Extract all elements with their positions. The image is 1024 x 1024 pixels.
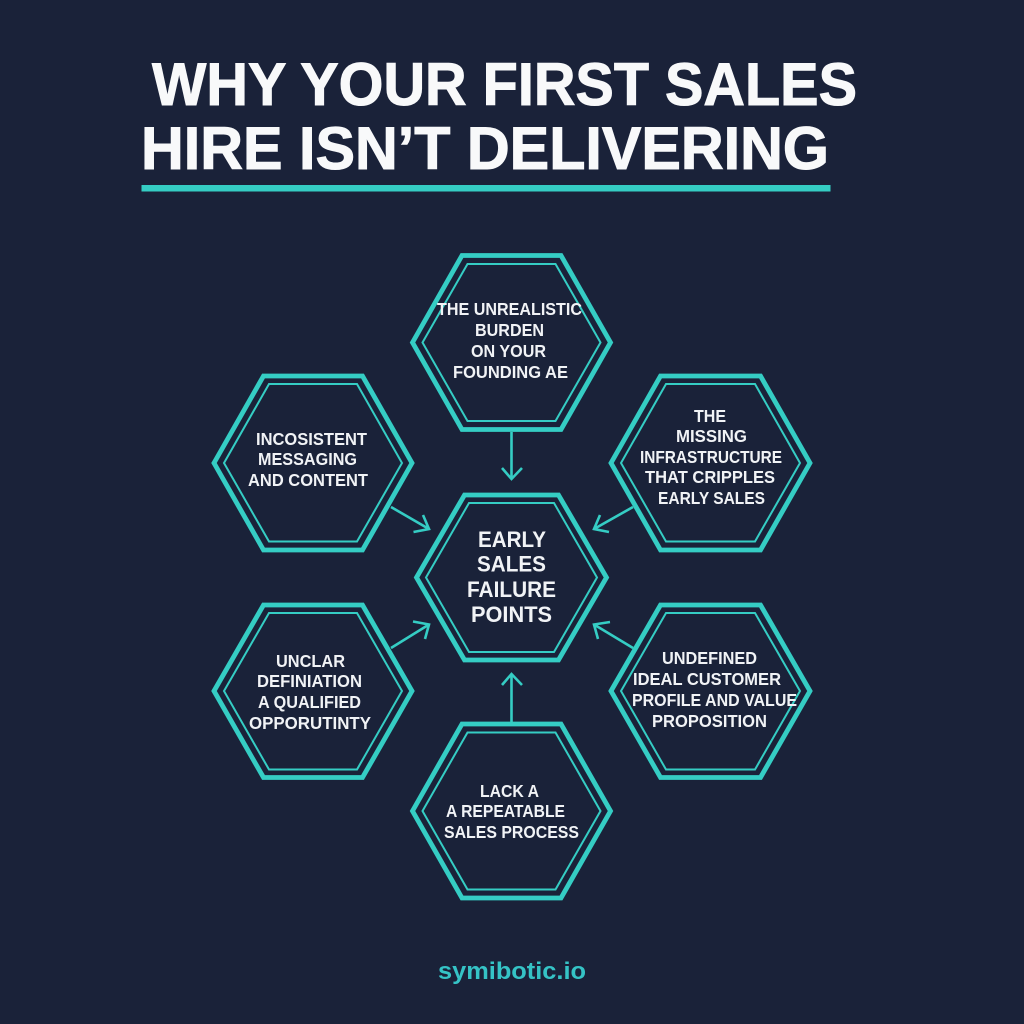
- hexagon: undefined ideal customer profile: IDEAL CUSTOMER: [633, 669, 781, 689]
- arrow: upper left to center: [391, 507, 429, 532]
- center hexagon: early sales failure points: SALES: [477, 552, 546, 576]
- hexagon: the unrealistic burden: FOUNDING AE: [453, 362, 568, 382]
- hexagon: undefined ideal customer profile: PROPOSITION: [652, 711, 767, 731]
- hexagon: the unrealistic burden: THE UNREALISTIC: [437, 299, 582, 319]
- hexagon: inconsistent messaging: MESSAGING: [258, 449, 357, 469]
- hexagon: inconsistent messaging: AND CONTENT: [248, 470, 368, 490]
- center hexagon: early sales failure points: POINTS: [471, 602, 552, 627]
- arrow: upper right to center: [594, 507, 633, 532]
- arrow: lower left to center: [391, 622, 429, 648]
- hexagon: the unrealistic burden: BURDEN: [475, 320, 544, 340]
- hexagon: unclear definition: OPPORUTINTY: [249, 713, 371, 733]
- hexagon: lack a repeatable sales process: SALES PROCESS: [444, 822, 579, 842]
- hexagon: missing infrastructure: THAT CRIPPLES: [645, 467, 775, 487]
- hexagon: lack a repeatable sales process: [412, 724, 610, 898]
- title underline: [142, 185, 830, 192]
- title: WHY YOUR FIRST SALES: [152, 50, 857, 118]
- hexagon: unclear definition: DEFINIATION: [257, 671, 362, 691]
- hexagon: the unrealistic burden: [412, 256, 610, 430]
- arrow: bottom to center: [502, 674, 522, 722]
- footer brand: symibotic.io: [438, 958, 586, 985]
- hexagon: unclear definition: [214, 605, 412, 778]
- hexagon: missing infrastructure: [611, 376, 810, 550]
- center hexagon: early sales failure points: [416, 495, 606, 660]
- hexagon: undefined ideal customer profile: PROFILE AND VALUE: [632, 690, 797, 710]
- center hexagon: early sales failure points: FAILURE: [467, 577, 556, 602]
- hexagon: inconsistent messaging: INCOSISTENT: [256, 429, 367, 449]
- hexagon: missing infrastructure: EARLY SALES: [658, 488, 765, 508]
- title: HIRE ISN’T DELIVERING: [141, 114, 829, 182]
- hexagon: undefined ideal customer profile: UNDEFINED: [662, 648, 757, 668]
- arrow: top to center: [502, 432, 522, 479]
- arrow: lower right to center: [594, 622, 633, 648]
- hexagon: inconsistent messaging: [214, 376, 412, 550]
- title: [141, 50, 857, 182]
- center hexagon: early sales failure points: EARLY: [478, 527, 546, 552]
- hexagon: missing infrastructure: MISSING: [676, 426, 747, 446]
- hexagon: lack a repeatable sales process: LACK A: [480, 781, 539, 801]
- hexagon: undefined ideal customer profile: [611, 605, 810, 778]
- hexagon: lack a repeatable sales process: A REPEATABLE: [446, 801, 565, 821]
- hexagon: unclear definition: UNCLAR: [276, 651, 345, 671]
- hexagon: missing infrastructure: THE: [694, 406, 726, 426]
- hexagon: the unrealistic burden: ON YOUR: [471, 341, 546, 361]
- hexagon: unclear definition: A QUALIFIED: [258, 692, 361, 712]
- hexagon: missing infrastructure: INFRASTRUCTURE: [640, 447, 782, 467]
